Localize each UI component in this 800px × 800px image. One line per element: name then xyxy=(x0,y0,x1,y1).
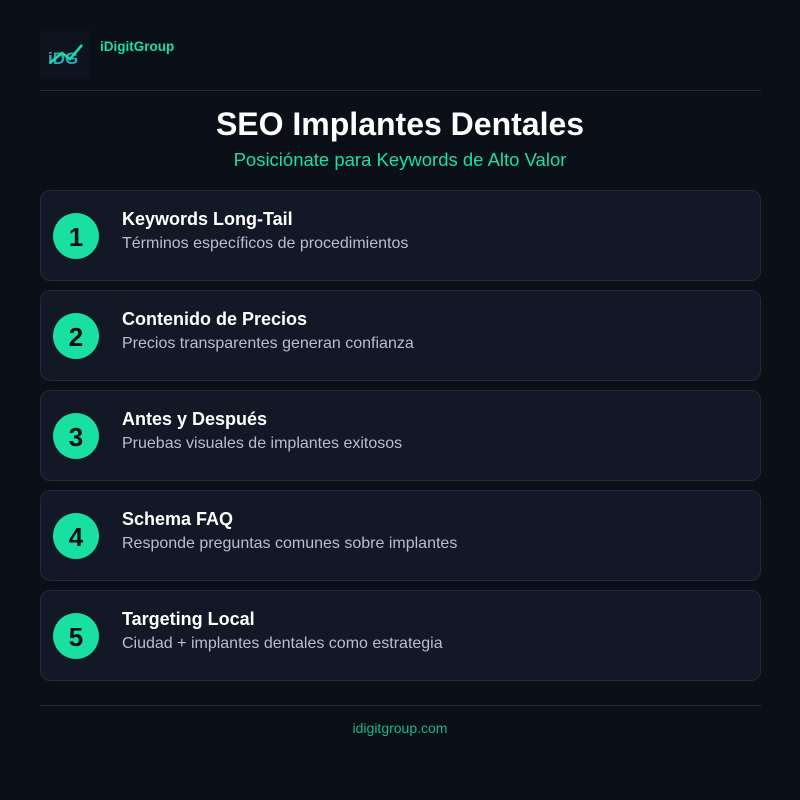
brand name: iDigitGroup xyxy=(100,39,174,54)
subtitle: Posiciónate para Keywords de Alto Valor xyxy=(234,149,566,170)
title: SEO Implantes Dentales xyxy=(216,106,584,142)
card 5: 5 xyxy=(69,622,83,652)
card 5: Ciudad + implantes dentales como estrategia xyxy=(122,635,443,652)
card 4: Schema FAQ xyxy=(122,509,233,529)
card 3: Pruebas visuales de implantes exitosos xyxy=(122,435,402,452)
card 5 xyxy=(40,590,761,681)
card 2: 2 xyxy=(69,322,83,352)
card 4: Responde preguntas comunes sobre implantes xyxy=(122,535,457,552)
card 3: Antes y Después xyxy=(122,409,267,429)
logo xyxy=(40,29,90,79)
footer: idigitgroup.com xyxy=(353,720,447,736)
card 4 xyxy=(40,490,761,581)
card 1: 1 xyxy=(69,222,83,252)
card 4: 4 xyxy=(69,522,83,552)
card 5: Targeting Local xyxy=(122,609,255,629)
card 2 xyxy=(40,290,761,381)
card 2: Contenido de Precios xyxy=(122,309,307,329)
card 3 xyxy=(40,390,761,481)
card 2: Precios transparentes generan confianza xyxy=(122,335,414,352)
card 1 xyxy=(40,190,761,281)
card 3: 3 xyxy=(69,422,83,452)
card 1: Términos específicos de procedimientos xyxy=(122,235,408,252)
card 1: Keywords Long-Tail xyxy=(122,209,293,229)
logo: iDG xyxy=(48,49,78,68)
